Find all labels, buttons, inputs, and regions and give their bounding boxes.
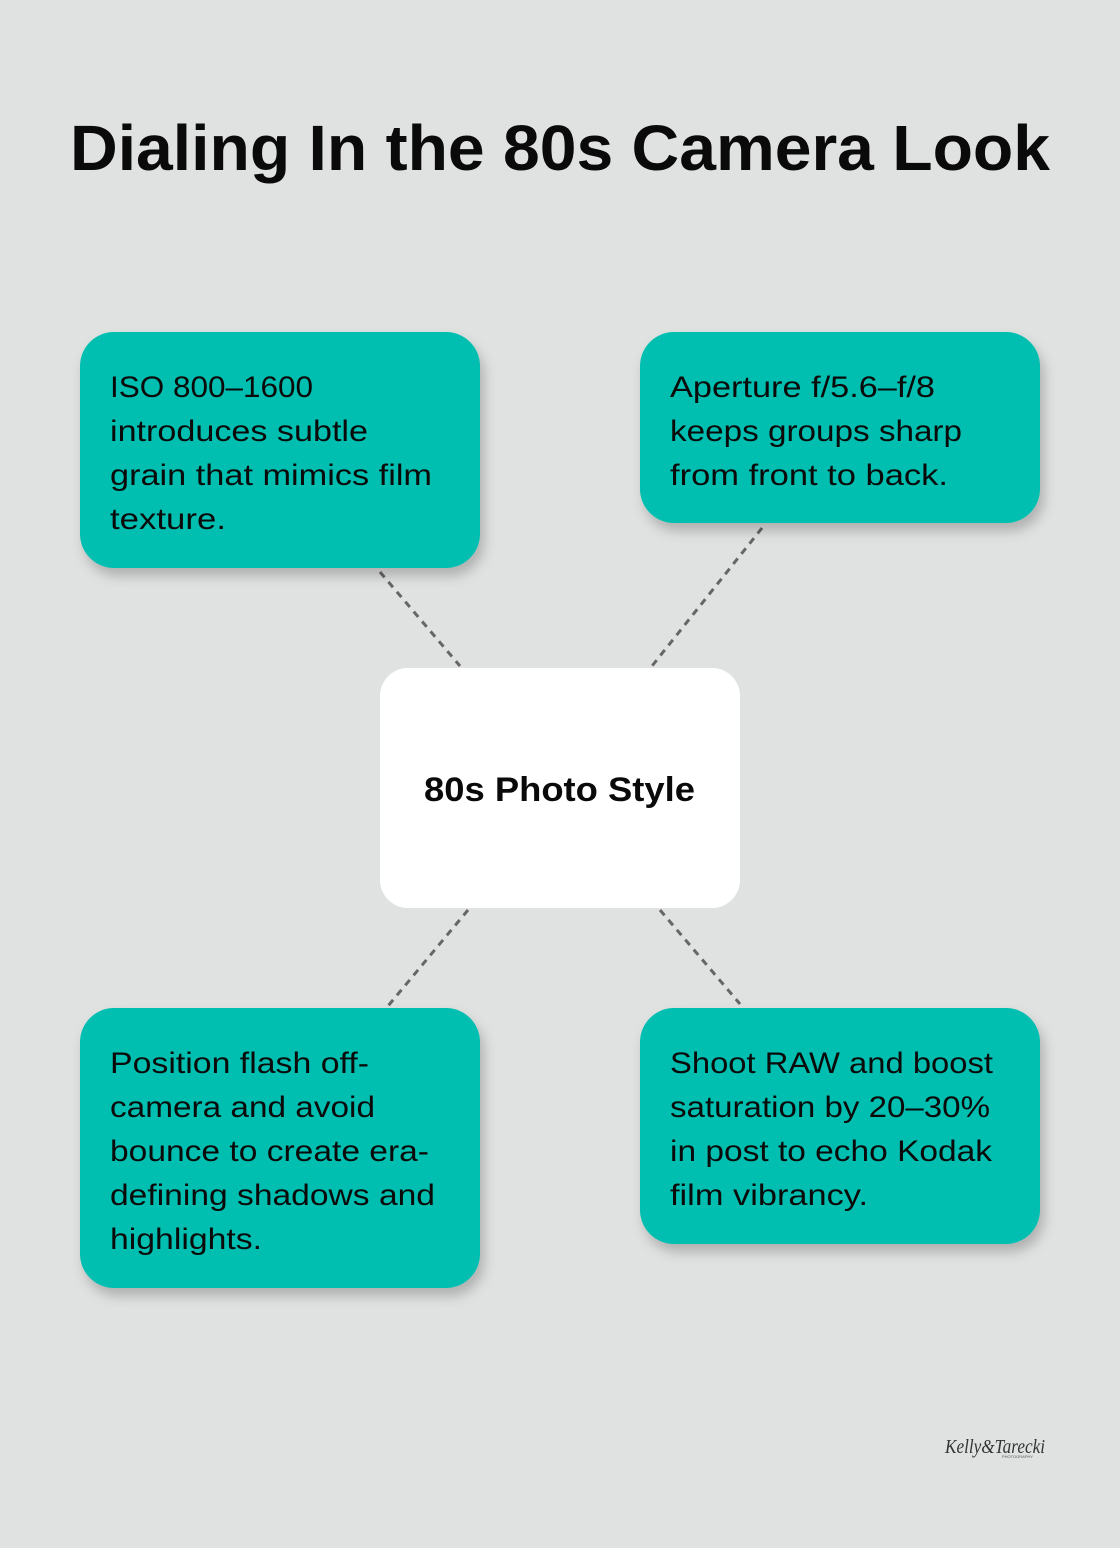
connector lines xyxy=(380,528,762,1006)
panel: ISO: grain that mimics film xyxy=(110,459,432,492)
panel: ISO xyxy=(80,332,480,568)
center node xyxy=(380,668,740,908)
panel: RAW: Shoot RAW and boost xyxy=(670,1047,994,1080)
panel: RAW: in post to echo Kodak xyxy=(670,1135,993,1168)
panel: aperture xyxy=(640,332,1040,523)
panel: aperture: keeps groups sharp xyxy=(670,415,962,448)
center node: 80s Photo Style xyxy=(424,771,695,809)
panel: aperture: from front to back. xyxy=(670,459,948,492)
panel: aperture: Aperture f/5.6–f/8 xyxy=(670,371,935,404)
panel: flash xyxy=(80,1008,480,1288)
panel: RAW: saturation by 20–30% xyxy=(670,1091,990,1124)
panel: RAW xyxy=(640,1008,1040,1244)
title: Dialing In the 80s Camera Look xyxy=(70,112,1050,184)
signature logo: PHOTOGRAPHY xyxy=(1002,1454,1033,1459)
panel: flash: camera and avoid xyxy=(110,1091,375,1124)
panel: flash: defining shadows and xyxy=(110,1179,435,1212)
panel: flash: highlights. xyxy=(110,1223,262,1256)
panel: ISO: introduces subtle xyxy=(110,415,368,448)
panel: RAW: film vibrancy. xyxy=(670,1179,868,1212)
signature logo: Kelly&Tarecki xyxy=(944,1436,1045,1458)
panel: flash: bounce to create era- xyxy=(110,1135,429,1168)
panel: flash: Position flash off- xyxy=(110,1047,369,1080)
panel: ISO: ISO 800–1600 xyxy=(110,371,313,404)
panel: ISO: texture. xyxy=(110,503,226,536)
